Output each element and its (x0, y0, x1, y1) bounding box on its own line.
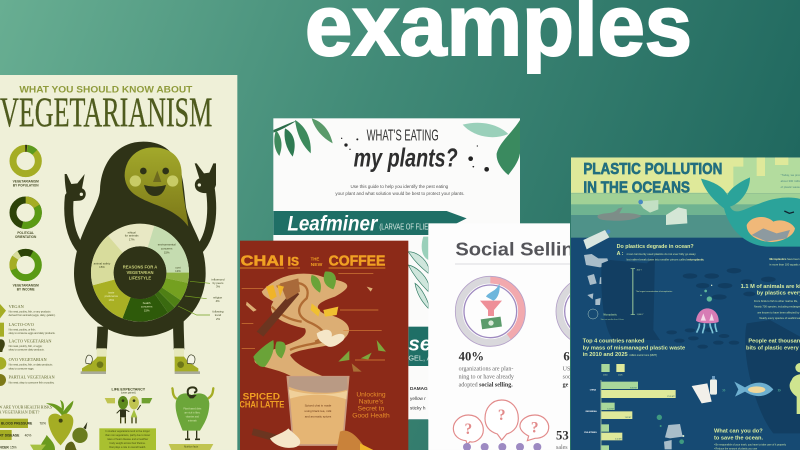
heading: my plants?: my plants? (354, 143, 458, 173)
icon: partial vegetarian (0, 374, 6, 386)
wheel segment labels: for animals (125, 234, 139, 238)
stat: second, cropped: soc (563, 375, 571, 381)
subheading: spiced chai latte: CHAI LATTE (239, 399, 284, 409)
bar chart: mismanaged plastic waste: 17.81 MT (667, 396, 676, 398)
donut chart: second, cropped (556, 282, 570, 340)
bars: health risks: 40% (25, 433, 31, 437)
wheel segment labels: 15% (144, 309, 150, 313)
section: do plastics degrade: Do plastics degrade in ocean? (617, 244, 694, 250)
icon: fish with plastic (734, 382, 773, 397)
icon: lacto vegetarian (0, 339, 5, 352)
bar chart: mismanaged plastic waste: CHINA (590, 389, 597, 392)
stat description: ning to or have already (459, 375, 514, 381)
bar chart: mismanaged plastic waste: INDONESIA (586, 410, 597, 413)
list: vegetarian types: okay to consume dairy products. (9, 349, 45, 352)
heading: chai is the new coffee: IS (288, 254, 299, 268)
caption: political orientation: POLITICAL (17, 231, 34, 235)
wheel callouts: trend (215, 313, 222, 317)
heading: chai is the new coffee (241, 255, 385, 266)
section: animals affected (741, 284, 800, 320)
stat: third, cropped (556, 431, 568, 449)
wheel segment labels: health (143, 301, 151, 305)
caption: by income: BY INCOME (17, 287, 35, 291)
icon: top left leaves (273, 118, 333, 157)
wheel callouts: 2% (216, 317, 221, 321)
wheel callouts: 3% (216, 285, 221, 289)
panel: what's eating my plants (273, 118, 520, 423)
wheel segment labels: 13% (175, 269, 181, 273)
list: vegetarian types: OVO VEGETARIAN (9, 357, 47, 362)
heading: what you should know about: WHAT YOU SHOULD KNOW ABOUT (19, 84, 193, 94)
bars: health risks: 15% (10, 445, 17, 449)
footer band (408, 419, 428, 420)
chart: microplastic scale: 1,000 Y (637, 314, 644, 316)
subheading: spiced chai latte (240, 393, 284, 408)
section banner: second pest (408, 326, 428, 366)
icon: top right leaves (463, 120, 520, 175)
wheel segment labels: 15% (99, 265, 105, 269)
character: left shoe (81, 348, 107, 374)
heading: chai is the new coffee: THE (311, 257, 319, 262)
heading: plastic pollution in the oceans (583, 161, 722, 197)
heading: chai is the new coffee: CHAI (241, 253, 284, 269)
section: do plastics degrade (617, 244, 704, 261)
legend: years: 2010 (603, 374, 608, 376)
intro text: your plant and what solution would be best to protect your plants. (335, 191, 465, 196)
wheel center: reasons label (114, 246, 166, 299)
section: top 4 countries: by mass of mismanaged plastic waste (583, 345, 685, 351)
note: microplastics (769, 257, 800, 267)
icon: person (790, 363, 800, 414)
character: face (125, 147, 188, 227)
list: vegetarian types: LACTO VEGETARIAN (9, 339, 52, 344)
caption: by population: VEGETARIANISM (13, 179, 39, 183)
icon: audience (463, 443, 541, 450)
heading: what's eating: WHAT'S EATING (367, 128, 439, 145)
damage text: DAMAG (410, 386, 428, 391)
wheel center: reasons label: VEGETARIAN (127, 270, 153, 275)
bar chart: mismanaged plastic waste: 5.10 MT (615, 438, 623, 440)
list: vegetarian types (0, 304, 56, 386)
stat description (459, 367, 514, 389)
icon: right rock hand (195, 163, 216, 193)
question marks: ? (498, 407, 506, 424)
illustration: bell pepper character: are rich in fiber, (184, 411, 201, 414)
section: animals affected: From birds to fish to other marine life, (754, 299, 798, 303)
character: legs (102, 320, 179, 349)
stat: second, cropped: US (563, 367, 570, 373)
question marks: ? (464, 421, 472, 438)
bar chart: mismanaged plastic waste: 3.22 MT (607, 408, 615, 410)
heading: life expectancy: LIFE EXPECTANCY (112, 387, 146, 391)
wheel center: reasons label: REASONS FOR A (123, 265, 157, 270)
sky and sea bands (571, 157, 800, 238)
wheel callouts: influenced (212, 277, 225, 281)
caption: political orientation: ORIENTATION (15, 235, 37, 239)
illustration: spices at base (252, 428, 373, 450)
bubbles (700, 285, 712, 302)
section: what can you do: to save the ocean. (714, 435, 763, 441)
text block: life expectancy: body weight across their lifetime. (110, 442, 146, 445)
section: top 4 countries: in 2010 and 2025 million metric tons (MMT) (583, 352, 657, 358)
section: health question: W ARE YOUR HEALTH RISKS (0, 404, 52, 409)
text block: life expectancy: Diet plays a role in overall health. (109, 446, 146, 449)
icon: paper and bottle (692, 376, 717, 403)
wheel segment labels: concerns (161, 246, 173, 250)
arrows: food chain: » (722, 387, 726, 394)
section banner: leafminer (273, 211, 467, 236)
chart: microplastic scale (588, 268, 672, 321)
list: vegetarian types: okay to consume eggs and dairy products. (9, 332, 56, 335)
illustration: glass of chai latte (287, 377, 349, 445)
bars: health risks: 70% (39, 421, 46, 425)
icon: jellyfish (696, 308, 719, 333)
donut chart: by income (8, 247, 43, 283)
bars: health risks: BLOOD PRESSURE (1, 421, 33, 425)
list: vegetarian types: No meat, poultry, fish, or eggs; (9, 345, 43, 348)
icon: lower leaf (408, 237, 428, 308)
section: do plastics degrade: but rather break down into smaller pieces called microplastic (627, 257, 704, 261)
arrows: food chain (722, 387, 781, 394)
caption: by population (12, 180, 39, 186)
panel: chai is the new coffee (239, 241, 408, 450)
subheading: spiced chai latte: SPICED (243, 391, 281, 401)
heading: chai is the new coffee: COFFEE (329, 253, 385, 269)
chart: microplastic scale: Microplastic (603, 313, 618, 316)
legend: years (601, 364, 625, 376)
illustration: life expectancy figures (105, 396, 152, 423)
wheel segment labels: ethical (128, 230, 136, 234)
character: right shoe (174, 348, 200, 374)
section: people eat plastic (746, 339, 800, 351)
illustration: glass of chai latte: Spiced chai is made (305, 404, 332, 408)
damage text: yellow r (410, 396, 426, 401)
list: vegetarian types: okay to consume eggs. (9, 367, 35, 370)
wheel segment labels: 16% (108, 298, 115, 302)
wheel segment labels: 17% (129, 237, 135, 241)
illustration: whale (701, 177, 800, 247)
icon: funnel and money (480, 283, 502, 329)
section: what can you do: What can you do? (714, 429, 763, 435)
heading: life expectancy: (years gained) (121, 392, 136, 395)
icon: fish school (666, 268, 776, 349)
caption: by income: VEGETARIANISM (13, 283, 39, 287)
silhouette: plastic bags (601, 257, 800, 433)
heading: social selling: Social Selling (455, 238, 586, 259)
bar chart: mismanaged plastic waste: PHILIPPINES (584, 432, 597, 434)
section: health question (0, 404, 52, 414)
illustration: plastic fragments (584, 254, 609, 305)
caption: political orientation (15, 231, 37, 239)
tagline: Nature's (359, 399, 384, 406)
character: arms (69, 187, 212, 250)
bar chart: mismanaged plastic waste: 7.42 MT (625, 417, 632, 419)
illustration: chai splash (246, 271, 386, 380)
illustration: glass of chai latte: and aromatic spices (305, 414, 332, 418)
intro text (335, 184, 465, 196)
section: do plastics degrade: most commonly used plastics do not ever fully go away (627, 252, 696, 256)
bar chart: mismanaged plastic waste: 8.82 MT (630, 387, 638, 389)
wheel segment labels: environmental (158, 243, 176, 247)
donut chart: political orientation (10, 196, 42, 229)
wheel callouts: following (212, 309, 224, 313)
icon: vegan (0, 304, 6, 318)
panel: vegetarianism (0, 75, 237, 450)
wheel callouts: 4% (216, 299, 220, 303)
ink splatter (341, 138, 489, 172)
list: vegetarian types: PARTIAL VEGETARIAN (9, 375, 56, 380)
section: top 4 countries: Top 4 countries ranked (583, 339, 645, 345)
donut chart: by population (11, 147, 40, 175)
chart: reasons wheel (87, 219, 193, 326)
quote (781, 173, 800, 189)
heading: plastic pollution in the oceans: PLASTIC POLLUTION (583, 161, 722, 178)
chart: microplastic scale: Size not smaller than 0.5mm (601, 318, 624, 321)
section banner: second pest: sec (408, 333, 443, 356)
list: vegetarian types: No meat; okay to consume fish or poultry. (9, 382, 55, 385)
illustration: bell pepper character: Plant-based diets (183, 407, 202, 410)
chart: microplastic scale: The largest concentration of microplastics (636, 290, 672, 293)
wheel callouts: religion (213, 295, 223, 299)
illustration: lower fragments (657, 415, 684, 449)
icon: ovo vegetarian (0, 357, 6, 370)
ribbon: pepper caption: Nutrition facts (184, 446, 199, 449)
section: what can you do (714, 429, 787, 450)
text block: life expectancy (99, 428, 156, 450)
text block: life expectancy: rates of heart disease and a healthier (107, 438, 148, 441)
heading: life expectancy (112, 387, 146, 395)
list: vegetarian types: No meat, poultry, or fish; (9, 328, 36, 331)
wheel segment labels: 15% (164, 250, 170, 254)
stat: second, cropped: 6 (563, 350, 570, 364)
intro text: Use this guide to help you identify the pest eating (350, 184, 449, 189)
text block: life expectancy: than non-vegetarians, partly due to lower (105, 434, 150, 437)
ribbon: pepper caption (169, 444, 213, 450)
bar chart: mismanaged plastic waste (584, 380, 676, 450)
chart: microplastic scale: 400 Y (637, 270, 642, 272)
stat: third, cropped: 53 (556, 428, 569, 442)
list: vegetarian types: VEGAN (9, 304, 25, 309)
icon: question bubbles (453, 400, 549, 444)
caption: by population: BY POPULATION (13, 183, 39, 187)
wheel segment labels: taste (108, 290, 115, 294)
question marks (465, 410, 538, 434)
panel: social selling (428, 223, 570, 450)
section banner: leafminer: Leafminer (287, 212, 379, 236)
question marks: ? (531, 420, 538, 437)
heading underlines (240, 268, 386, 269)
tagline: Unlocking (356, 392, 386, 399)
text block: life expectancy: In studies vegetarians tend to live longer (105, 430, 150, 433)
damage text (410, 386, 428, 410)
heading: vegetarianism: VEGETARIANISM (0, 91, 212, 137)
tagline: Good Health (352, 413, 390, 420)
bars: health risks (0, 419, 46, 449)
annotation lines (242, 273, 385, 360)
caption: by income (13, 283, 39, 291)
damage text: sticky h (410, 405, 426, 410)
stat description: organizations are plan- (459, 367, 513, 373)
illustration: vegetables group (30, 400, 88, 450)
panel: plastic pollution in the oceans (571, 157, 800, 450)
illustration: bell pepper character (172, 387, 213, 439)
character: avocado body (74, 142, 206, 337)
illustration: bell pepper character: minerals (188, 419, 198, 422)
list: vegetarian types: LACTO-OVO (9, 322, 34, 327)
heading: plastic pollution in the oceans: IN THE OCEANS (583, 180, 690, 197)
wheel callouts: by peers (213, 281, 224, 285)
wheel callouts (178, 277, 225, 321)
divider line (455, 263, 570, 265)
list: vegetarian types: derived from animals (eggs, dairy, gelatin). (9, 314, 56, 317)
list: vegetarian types: No meat, poultry, fish, or any products (9, 310, 51, 313)
wheel segment labels: animal safety (94, 261, 111, 265)
section: what can you do: • Be responsible of your trash, you have to take care of it properly (714, 444, 787, 447)
stat description: adopted social selling. (459, 383, 513, 389)
wheel segment labels: preference (105, 294, 119, 298)
wheel segment labels: cost (175, 265, 181, 269)
wheel segment labels (94, 230, 181, 313)
stat: second, cropped (562, 352, 570, 388)
tagline: Secret to (358, 406, 385, 413)
tagline (352, 392, 390, 418)
section: do plastics degrade: A : (617, 251, 624, 257)
icon: left rock hand (65, 174, 86, 201)
heading: chai is the new coffee: NEW (311, 262, 323, 268)
illustration: glass of chai latte: using black tea, milk (305, 409, 332, 413)
section banner: leafminer: (LARVAE OF FLIES AND (379, 222, 446, 231)
stat: 40 percent: 40% (459, 350, 484, 364)
arrows: food chain: » (777, 387, 781, 394)
wheel center: reasons label: LIFESTYLE (129, 275, 151, 280)
section: top 4 countries (583, 339, 685, 358)
illustration: surface debris (583, 200, 687, 249)
illustration: bell pepper character: vitamins and (186, 415, 200, 418)
section banner: second pest: GEL, APH (408, 354, 442, 363)
donut chart: 40 percent (455, 276, 525, 346)
wheel segment labels: concerns (141, 305, 153, 309)
stat: second, cropped: ge (563, 383, 569, 389)
list: vegetarian types: No meat, poultry, fish, or dairy products; (9, 364, 53, 367)
icon: lacto-ovo (0, 323, 4, 337)
legend: years: 2025 (618, 374, 623, 376)
